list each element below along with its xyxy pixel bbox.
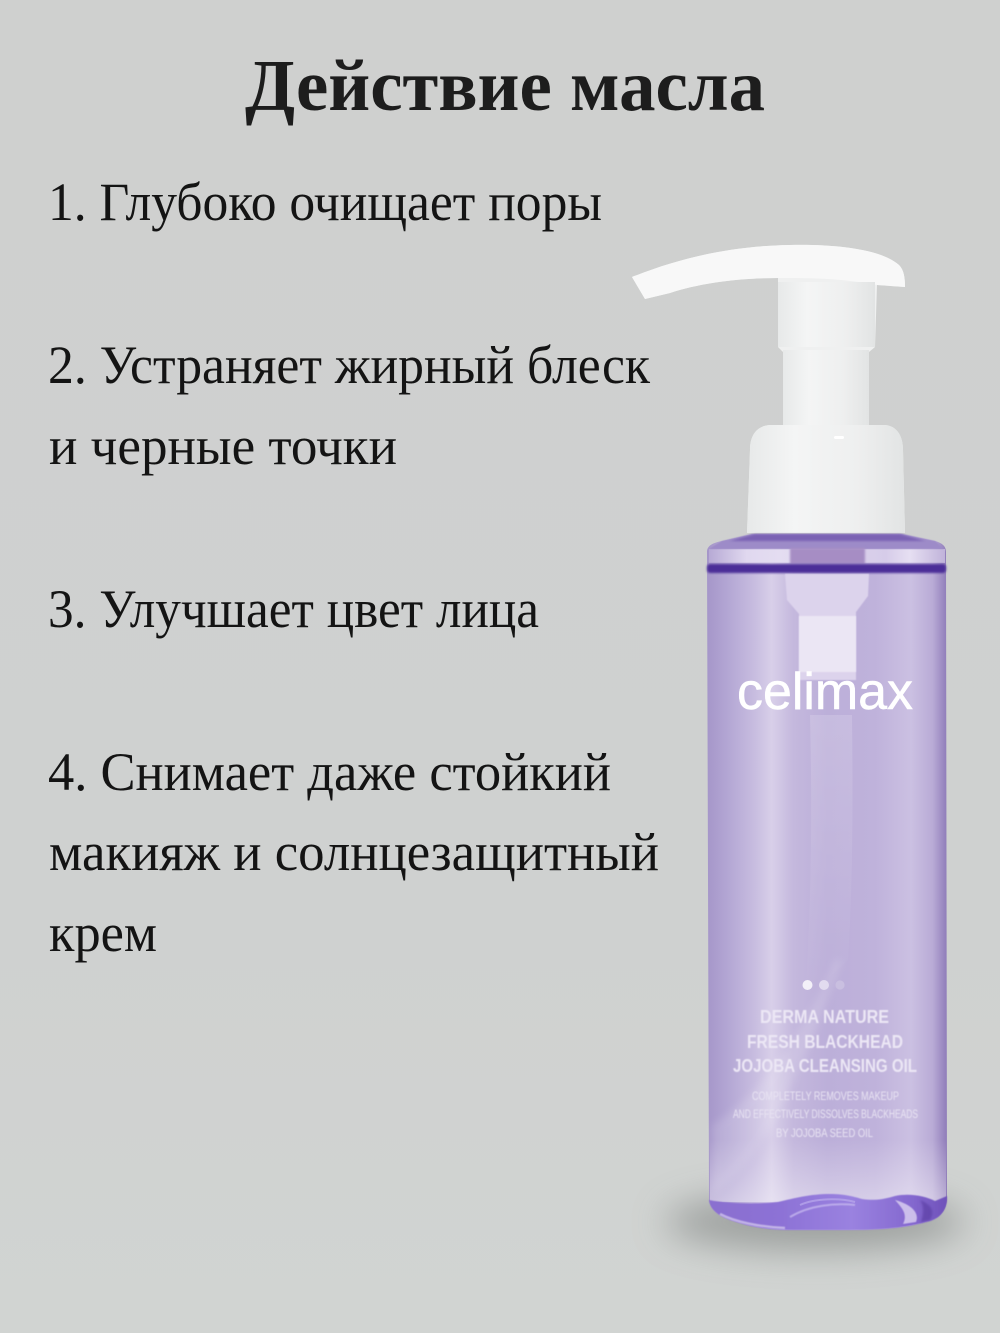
product name xyxy=(733,1007,917,1076)
list item 4: 4. Снимает даже стойкий xyxy=(48,742,611,802)
product description xyxy=(733,1091,918,1140)
list item 4: крем xyxy=(49,903,157,963)
list item 2: и черные точки xyxy=(49,416,397,476)
product description: BY JOJOBA SEED OIL xyxy=(776,1128,873,1140)
product name: DERMA NATURE xyxy=(760,1007,889,1027)
bottle shoulder band xyxy=(707,534,946,573)
list item 2: 2. Устраняет жирный блеск xyxy=(48,335,651,395)
product description: COMPLETELY REMOVES MAKEUP xyxy=(752,1091,899,1103)
bottle body xyxy=(707,534,947,1230)
pump dispenser xyxy=(632,245,905,533)
inner dip tube xyxy=(785,574,869,1000)
liquid swirl reflection xyxy=(712,960,842,1195)
product name: FRESH BLACKHEAD xyxy=(747,1032,903,1052)
title: Действие масла xyxy=(245,45,765,126)
bottle shadow xyxy=(665,1194,965,1250)
brand logo: celimax xyxy=(737,663,913,721)
list item 4: макияж и солнцезащитный xyxy=(49,822,659,882)
list item 2 xyxy=(48,335,651,476)
list item 1: 1. Глубоко очищает поры xyxy=(48,172,602,232)
list item 3: 3. Улучшает цвет лица xyxy=(48,579,539,639)
lower body highlight xyxy=(710,1140,946,1202)
product: cleansing oil bottle xyxy=(632,245,965,1250)
product name: JOJOBA CLEANSING OIL xyxy=(733,1056,917,1076)
list item 4 xyxy=(48,742,659,963)
three dots xyxy=(802,980,845,990)
product description: AND EFFECTIVELY DISSOLVES BLACKHEADS xyxy=(733,1109,918,1121)
bottle base liquid xyxy=(709,1194,947,1230)
